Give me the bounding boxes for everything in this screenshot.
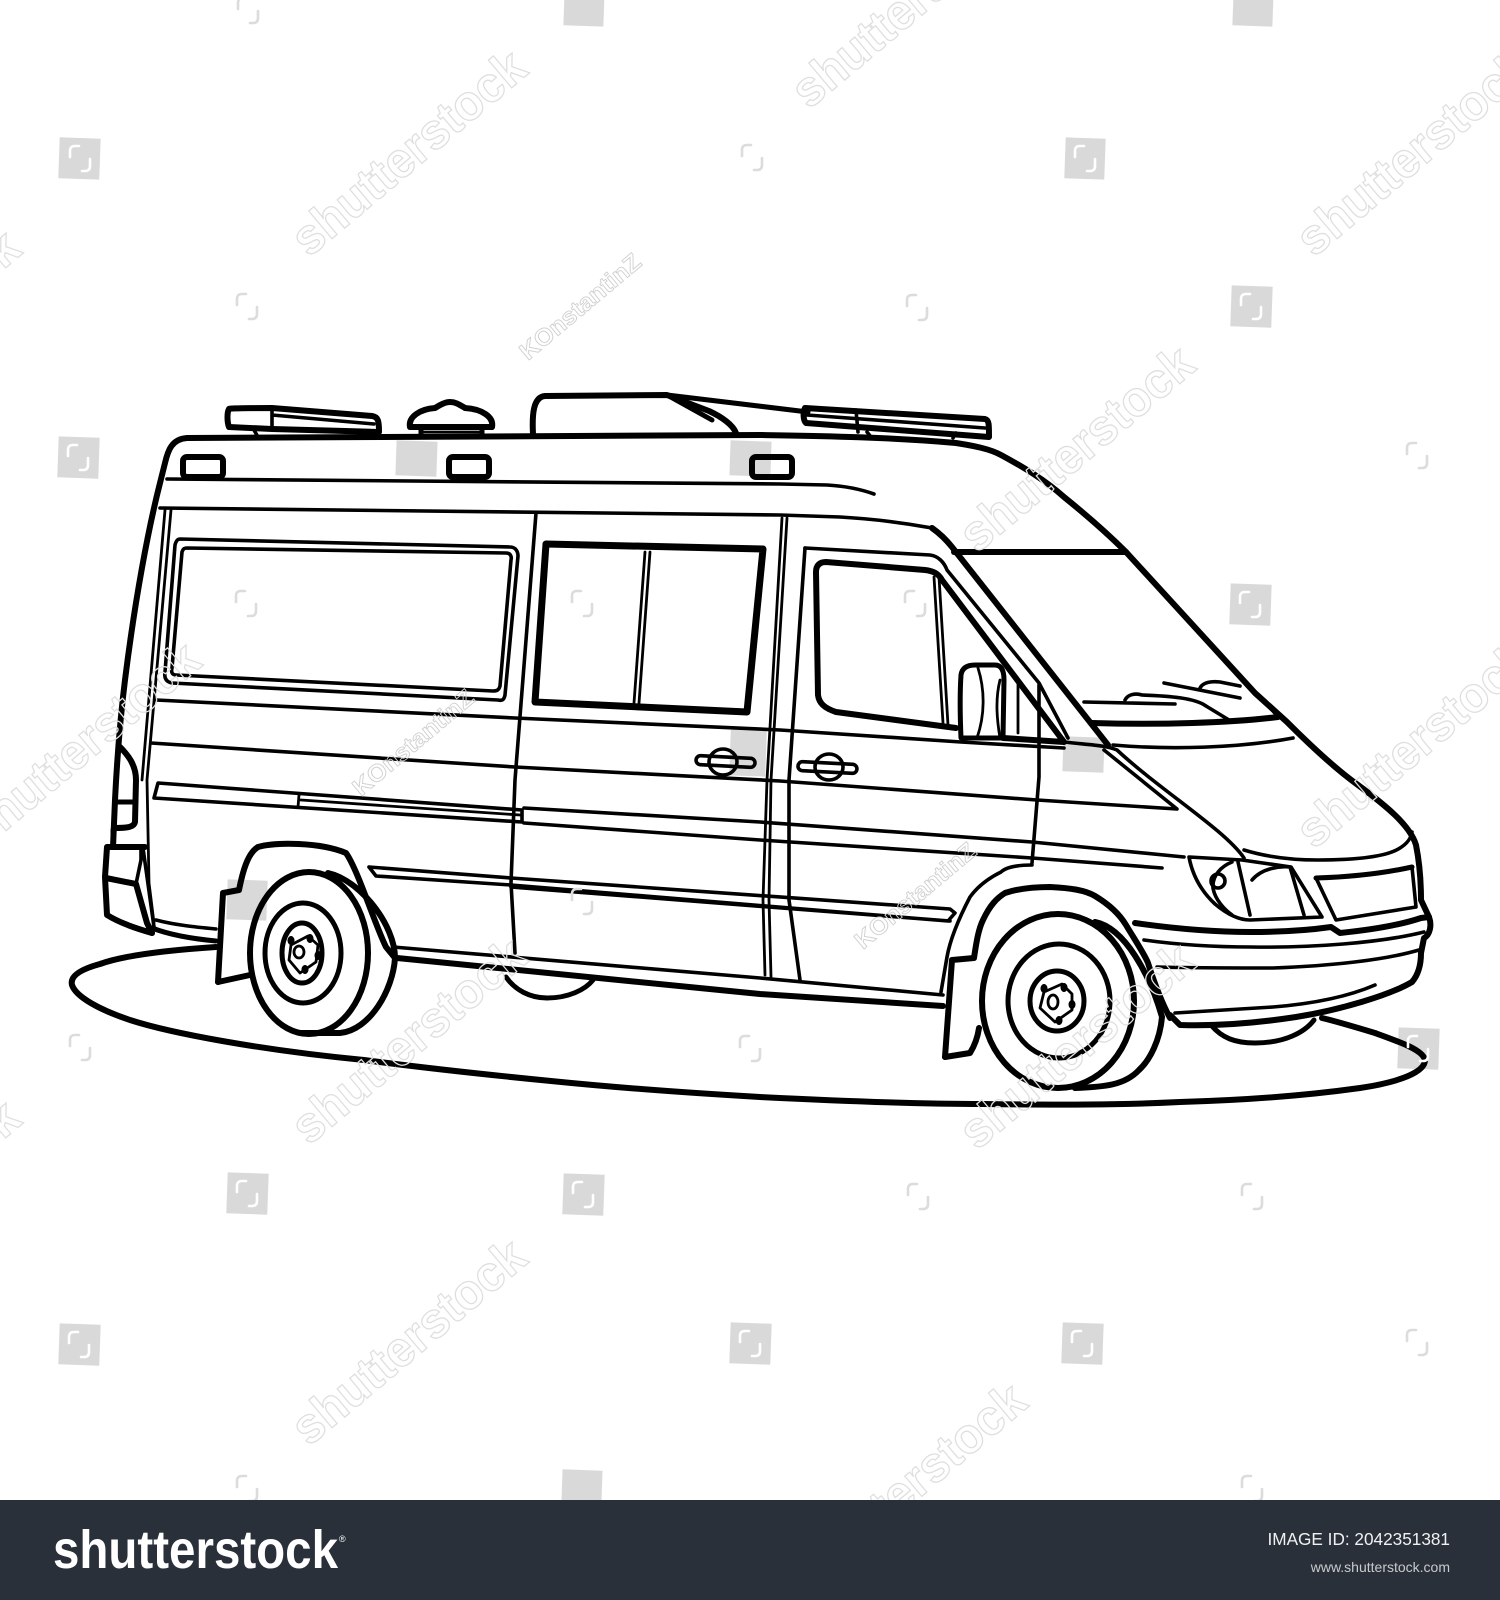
rear wheel face: [250, 872, 368, 1034]
front wheel: [982, 914, 1162, 1088]
image id: IMAGE ID: 2042351381: [1268, 1529, 1450, 1549]
body sill: [152, 920, 943, 1006]
rear tire: [300, 873, 395, 1033]
front wheel arch: [941, 865, 1170, 1057]
windshield wipers: [1084, 682, 1240, 720]
watermark: contributor name: KOnstantinZ: [850, 837, 982, 955]
website url: www.shutterstock.com: [1310, 1559, 1450, 1575]
rear bumper and tail light: [105, 747, 154, 933]
windshield: [932, 528, 1293, 748]
watermark: repeated brand text: shutterstock: [948, 931, 1205, 1159]
body horizontal lines: [151, 479, 1244, 868]
roof air conditioning unit: [533, 395, 808, 434]
watermark: repeated brand text: shutterstock: [948, 334, 1205, 562]
watermark: repeated brand text: shutterstock: [780, 1371, 1037, 1599]
spare wheel under rear: [506, 977, 593, 998]
body side trim strip: [154, 783, 522, 822]
ambulance van: [105, 395, 1430, 1088]
ground ellipse shadow: [72, 947, 1425, 1105]
rear roof light bar: [228, 408, 379, 437]
watermark: white swirls in stamps: [68, 146, 1428, 1357]
front roof light bar: [804, 408, 989, 438]
sliding door lines: [511, 513, 1068, 980]
watermark: contributor name: [348, 248, 982, 955]
watermark: repeated brand text: shutterstock: [280, 926, 537, 1154]
middle door window: [535, 544, 763, 712]
hood line: [1244, 832, 1412, 860]
front rim: [1008, 944, 1110, 1058]
wing mirror: [960, 665, 1018, 738]
handle: middle door: [696, 749, 755, 775]
rear wheel arch: [218, 844, 395, 982]
rear side window: [165, 539, 518, 700]
watermark: contributor name: KOnstantinZ: [348, 684, 480, 802]
registered mark: ®: [339, 1534, 346, 1544]
front grille: [1316, 867, 1416, 920]
watermark: repeated brand text: shutterstock: [280, 1227, 537, 1455]
roof marker lights: [183, 457, 792, 477]
watermark: repeated brand text: shutterstock: [280, 38, 537, 266]
rear hub: [282, 923, 322, 983]
rear wheel: [250, 872, 395, 1034]
footer logo: shutterstock: [53, 1520, 339, 1580]
front bumper: [1135, 917, 1430, 1025]
rear rim: [265, 903, 341, 1003]
front hub: [1030, 971, 1084, 1031]
handle: cab door: [798, 754, 857, 780]
roof line and rear edge: [113, 435, 1429, 917]
under front axle: [1211, 1020, 1314, 1043]
door handles: [696, 749, 857, 780]
headlight: [1189, 857, 1322, 920]
lower door trim: [369, 867, 955, 921]
front tire: [1075, 922, 1162, 1088]
front wheel face: [982, 914, 1134, 1088]
rear pillar double line: [142, 510, 171, 923]
footer band: [0, 1500, 1500, 1600]
watermark: contributor name: KOnstantinZ: [515, 248, 647, 366]
cab door window: [816, 562, 1064, 742]
roof dome vent: [410, 402, 492, 437]
